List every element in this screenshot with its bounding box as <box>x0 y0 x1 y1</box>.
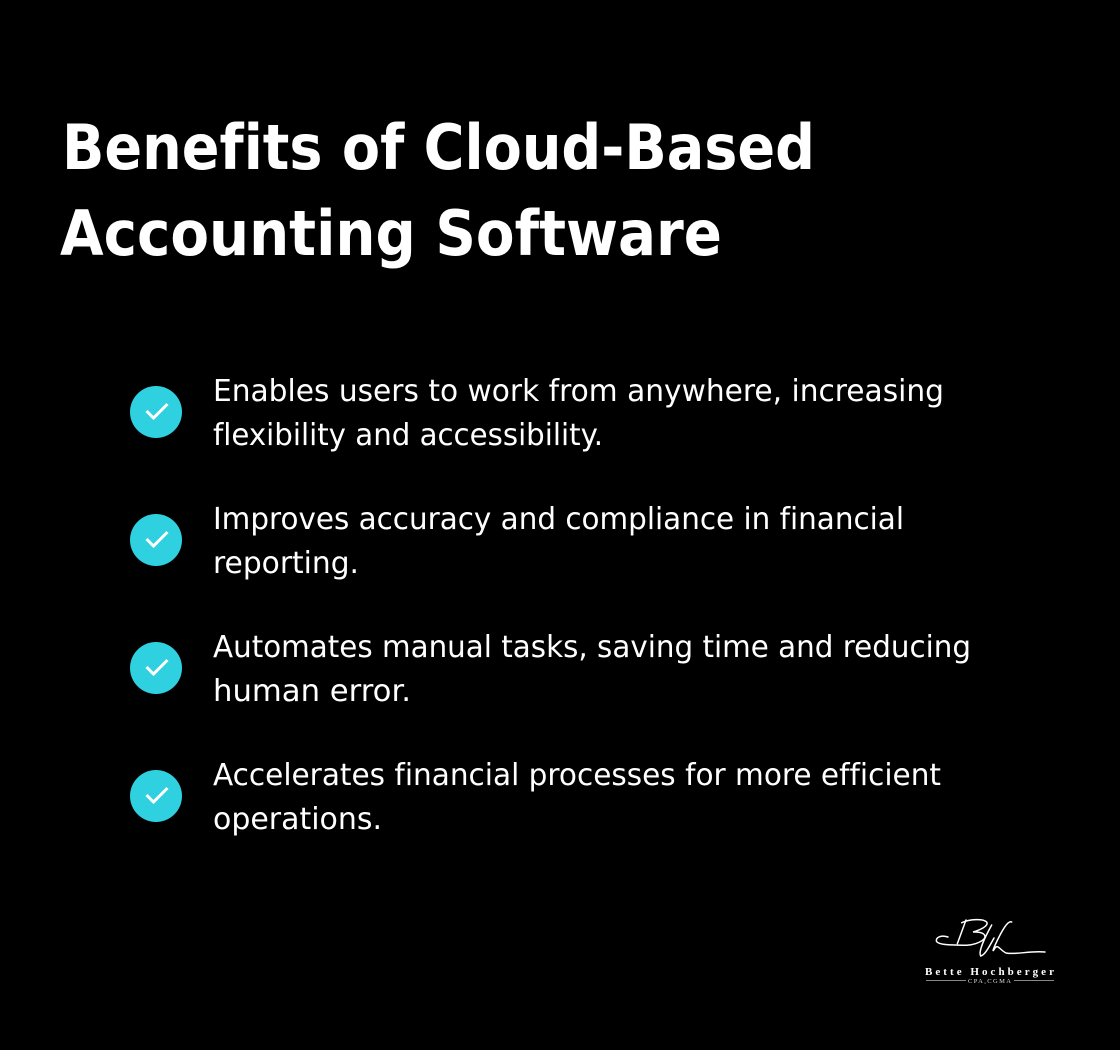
text: accuracy: Improves accuracy and compliance in financial <box>213 502 904 537</box>
text: automation: human error. <box>213 674 411 709</box>
logo: Bette Hochberger <box>925 920 1054 985</box>
text: automation: Automates manual tasks, saving time and reducing <box>213 630 971 665</box>
title: Benefits of Cloud-Based <box>62 111 815 184</box>
text: faster processes: operations. <box>213 802 382 837</box>
benefit: faster processes <box>130 758 941 837</box>
icon: check badge <box>130 770 182 822</box>
benefit: automation <box>130 630 971 709</box>
benefit: accuracy <box>130 502 904 581</box>
text: work from anywhere: Enables users to work from anywhere, increasing <box>213 374 944 409</box>
icon: signature <box>936 920 1045 956</box>
text: automation <box>213 630 971 709</box>
text: faster processes: Accelerates financial processes for more efficient <box>213 758 941 793</box>
text: work from anywhere <box>213 374 944 453</box>
logo name: Bette Hochberger <box>925 966 1054 978</box>
logo credentials: CPA,CGMA <box>968 978 1011 985</box>
text: accuracy <box>213 502 904 581</box>
benefit: work from anywhere <box>130 374 944 453</box>
text: accuracy: reporting. <box>213 546 359 581</box>
text: faster processes <box>213 758 941 837</box>
title: Accounting Software <box>60 197 722 270</box>
text: work from anywhere: flexibility and accessibility. <box>213 418 603 453</box>
icon: check badge <box>130 386 182 438</box>
icon: check badge <box>130 642 182 694</box>
icon: check badge <box>130 514 182 566</box>
title <box>60 111 815 270</box>
